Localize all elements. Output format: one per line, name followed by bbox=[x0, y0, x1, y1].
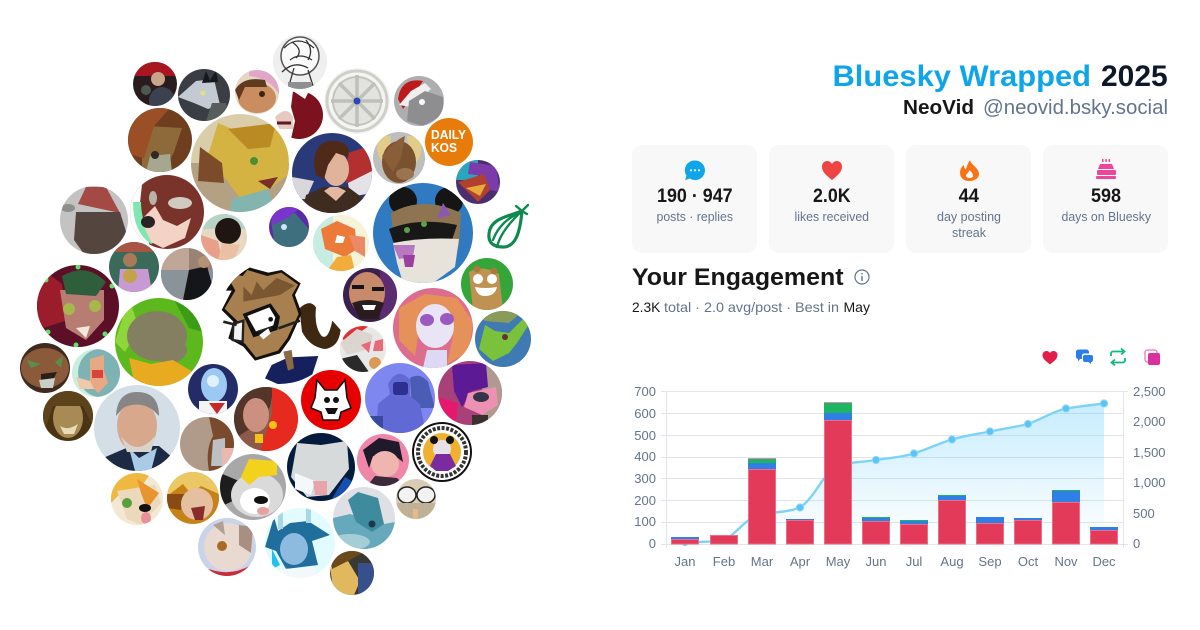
user name and handle: @neovid.bsky.social bbox=[983, 97, 1168, 119]
left axis labels: 200 bbox=[634, 493, 656, 508]
avatar: santa white character bbox=[340, 326, 386, 372]
month labels bbox=[675, 554, 1116, 569]
title: Bluesky Wrapped bbox=[832, 60, 1091, 93]
right axis labels: 1,000 bbox=[1133, 475, 1166, 490]
left axis labels: 0 bbox=[649, 536, 656, 551]
avatar: silver dharma wheel bbox=[324, 68, 390, 134]
engagement summary: total · 2.0 avg/post · Best in bbox=[664, 299, 839, 315]
icon: heart bbox=[822, 161, 842, 180]
avatar: woman with American flag bbox=[292, 133, 372, 213]
panel: day posting streak bbox=[906, 145, 1031, 253]
month labels: May bbox=[826, 554, 851, 569]
avatar: hooded figure bbox=[365, 363, 435, 433]
avatar: older man in suit bbox=[94, 385, 180, 471]
left axis labels: 100 bbox=[634, 514, 656, 529]
avatar cloud bbox=[20, 35, 531, 595]
chart legend icons bbox=[1042, 348, 1160, 366]
avatar: brown ear closeup bbox=[180, 417, 234, 471]
engagement summary: May bbox=[844, 299, 870, 315]
left axis labels: 700 bbox=[634, 384, 656, 399]
avatar: main glasses character bbox=[213, 260, 347, 393]
avatar: golden fox bbox=[191, 114, 289, 212]
icon: legend quotes bbox=[1145, 350, 1160, 365]
right axis labels: 2,500 bbox=[1133, 384, 1166, 399]
panel: day posting streak: streak bbox=[952, 225, 986, 240]
panel: days on Bluesky: days on Bluesky bbox=[1062, 209, 1151, 224]
avatar: blue ghost bbox=[188, 364, 238, 414]
panel: likes received: likes received bbox=[794, 209, 869, 224]
avatar: rhino in santa hat bbox=[394, 76, 444, 126]
avatar: goggles creature bbox=[396, 479, 436, 519]
stacked bars: quotes bbox=[748, 402, 852, 459]
avatar: purple teal pony bbox=[269, 207, 309, 247]
avatar: pink and purple badger bbox=[438, 361, 502, 425]
avatar: red wolf bbox=[130, 175, 204, 249]
panel: days on Bluesky bbox=[1043, 145, 1168, 253]
avatar: hyena bbox=[20, 343, 70, 393]
month labels: Nov bbox=[1054, 554, 1078, 569]
line points bbox=[682, 400, 1108, 546]
month labels: Jun bbox=[866, 554, 886, 569]
avatar: lion bbox=[128, 108, 192, 172]
right axis labels: 0 bbox=[1133, 536, 1140, 551]
month labels: Jan bbox=[675, 554, 695, 569]
avatar: badge bbox=[412, 422, 472, 482]
avatar: bearded man with glasses bbox=[343, 268, 397, 322]
avatar: brown hair with pink hat bbox=[235, 70, 279, 114]
panel: days on Bluesky: 598 bbox=[1091, 186, 1121, 207]
avatar: raccoon bbox=[373, 183, 473, 283]
avatar: kangaroo bbox=[72, 349, 122, 397]
left axis labels bbox=[634, 384, 656, 551]
month labels: Jul bbox=[906, 554, 922, 569]
month labels: Dec bbox=[1092, 554, 1116, 569]
panel: posts and replies bbox=[632, 145, 757, 253]
avatar: tan horned goat bbox=[373, 132, 425, 184]
month labels: Feb bbox=[713, 554, 735, 569]
engagement summary: 2.3K bbox=[632, 299, 661, 315]
avatar: grey dinosaur bbox=[178, 69, 230, 121]
month labels: Apr bbox=[790, 554, 811, 569]
avatar: leopard in gold bbox=[330, 551, 374, 595]
avatar: grey husky with yellow hair bbox=[220, 454, 286, 520]
icon: info bbox=[855, 270, 869, 284]
avatar: pink girl bbox=[357, 434, 409, 486]
stacked bars: likes bbox=[672, 420, 1118, 544]
avatar: green onion logo bbox=[489, 205, 528, 247]
avatar: red wolf logo bbox=[301, 370, 361, 430]
chart grid bbox=[661, 391, 1128, 548]
avatar: blue haired character bbox=[265, 508, 335, 578]
icon: legend replies bbox=[1076, 350, 1093, 364]
avatar: person on balcony bbox=[161, 248, 213, 300]
cumulative area bbox=[685, 404, 1104, 544]
avatar: Daily Kos logo: DAILY bbox=[431, 127, 466, 142]
user name and handle bbox=[903, 97, 1168, 119]
left axis labels: 600 bbox=[634, 406, 656, 421]
avatar: purple wolf bbox=[456, 160, 500, 204]
panel: posts and replies: 190 · 947 bbox=[657, 186, 733, 207]
left axis labels: 300 bbox=[634, 471, 656, 486]
heading: your engagement: Your Engagement bbox=[632, 264, 844, 291]
title: 2025 bbox=[1101, 60, 1168, 93]
avatar: dark red figure bbox=[275, 91, 323, 139]
icon: flame bbox=[960, 160, 979, 181]
avatar: man in red room bbox=[133, 62, 177, 106]
right axis labels: 1,500 bbox=[1133, 445, 1166, 460]
left axis labels: 400 bbox=[634, 449, 656, 464]
avatar: fez creature bbox=[60, 186, 128, 254]
panel: likes received bbox=[769, 145, 894, 253]
avatar: festive cat bbox=[37, 264, 119, 348]
avatar: beige creature with scarf bbox=[198, 518, 256, 576]
month labels: Sep bbox=[978, 554, 1002, 569]
right axis labels bbox=[1133, 384, 1166, 551]
panel: posts and replies: posts · replies bbox=[656, 209, 733, 224]
panel: day posting streak: day posting bbox=[937, 209, 1001, 224]
avatar: green dragon bbox=[475, 311, 531, 367]
left axis labels: 500 bbox=[634, 428, 656, 443]
month labels: Oct bbox=[1018, 554, 1038, 569]
icon: chat bubble bbox=[685, 160, 705, 180]
avatar: Daily Kos logo bbox=[425, 118, 473, 166]
combo chart: monthly engagement bbox=[634, 384, 1166, 569]
user name and handle: NeoVid bbox=[903, 97, 974, 119]
icon: legend reposts bbox=[1111, 348, 1125, 366]
month labels: Mar bbox=[751, 554, 774, 569]
right axis labels: 500 bbox=[1133, 506, 1155, 521]
avatar: orange fox winking bbox=[111, 473, 163, 525]
cumulative line bbox=[685, 404, 1104, 542]
stacked bars: replies bbox=[671, 413, 1118, 539]
icon: birthday cake bbox=[1096, 159, 1116, 179]
icon: legend heart bbox=[1042, 351, 1058, 364]
avatar: sepia man bbox=[43, 391, 93, 441]
avatar: teal bear bbox=[330, 487, 395, 550]
avatar: green bunny bbox=[115, 298, 203, 386]
avatar: man with coconut bbox=[109, 242, 159, 292]
month labels: Aug bbox=[940, 554, 964, 569]
avatar: blonde hamster bbox=[167, 472, 219, 524]
avatar: line sketch bbox=[273, 35, 327, 89]
panel: day posting streak: 44 bbox=[959, 186, 979, 207]
avatar: white fox on dark blue bbox=[287, 433, 355, 501]
avatar: green stripe cartoon bear bbox=[461, 258, 513, 310]
avatar: cream figure bbox=[201, 214, 247, 260]
avatar: orange charmander bbox=[313, 215, 369, 271]
stacked bars: reposts bbox=[748, 403, 1080, 521]
right axis labels: 2,000 bbox=[1133, 414, 1166, 429]
avatar: Daily Kos logo: KOS bbox=[431, 140, 457, 155]
avatar: woman with glasses and red toy bbox=[234, 387, 298, 451]
avatar: pony with orange mane bbox=[393, 288, 473, 368]
panel: likes received: 2.0K bbox=[813, 186, 851, 207]
